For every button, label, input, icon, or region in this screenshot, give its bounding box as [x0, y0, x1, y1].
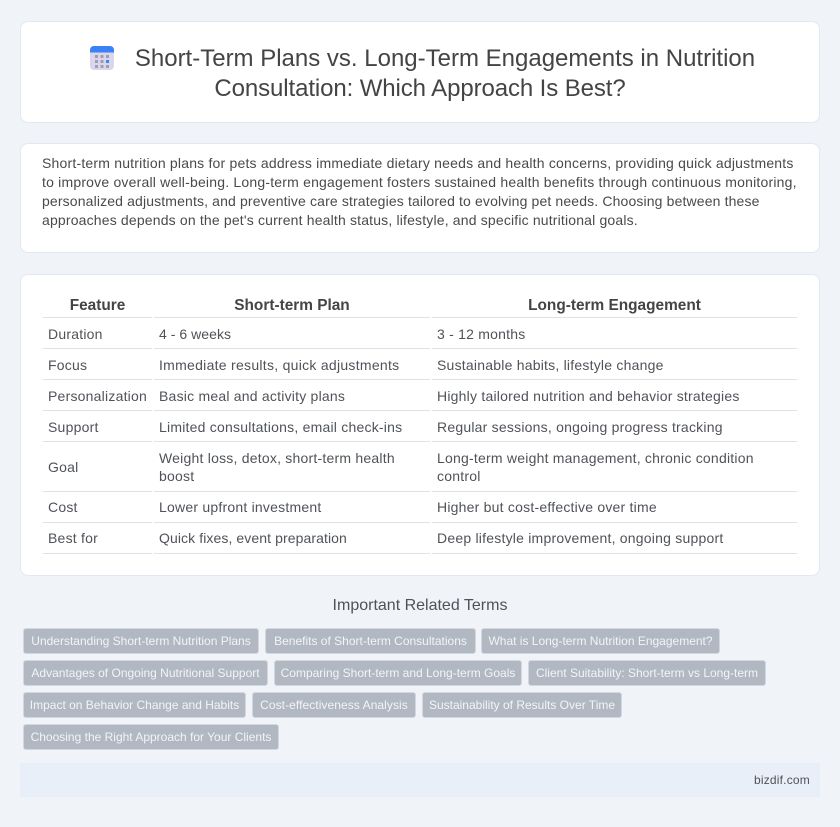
- tags: related terms: Understanding Short-term Nutrition Plans: [31, 634, 251, 648]
- heading: related terms: Important Related Terms: [333, 597, 507, 614]
- text block: description: approaches depends on the pet's current health status, lifestyle, and specific nutritional goals.: [42, 212, 638, 228]
- tags: related terms: Choosing the Right Approach for Your Clients: [31, 730, 271, 744]
- tags: related terms: What is Long-term Nutrition Engagement?: [488, 634, 713, 648]
- tags: related terms: Client Suitability: Short-term vs Long-term: [536, 666, 758, 680]
- table: comparison: Deep lifestyle improvement, ongoing support: [437, 530, 724, 546]
- panel: comparison table: [20, 274, 820, 576]
- tags: related terms: Cost-effectiveness Analysis: [260, 698, 408, 712]
- table: comparison: Best for: [48, 530, 98, 546]
- tags: related terms: Comparing Short-term and Long-term Goals: [281, 666, 515, 680]
- table: comparison: Regular sessions, ongoing progress tracking: [437, 419, 723, 435]
- table: comparison: Feature: [70, 297, 125, 314]
- table: comparison: Higher but cost-effective over time: [437, 499, 657, 515]
- footer text: bizdif.com: [754, 773, 810, 787]
- panel: header: [20, 21, 820, 123]
- table: comparison: boost: [159, 468, 194, 484]
- table: comparison: 3 - 12 months: [437, 326, 525, 342]
- table: comparison: Duration: [48, 326, 103, 342]
- table: comparison: Basic meal and activity plans: [159, 388, 345, 404]
- table: comparison: Weight loss, detox, short-term health: [159, 450, 395, 466]
- panel: description: [20, 143, 820, 253]
- tags: related terms: Advantages of Ongoing Nutritional Support: [31, 666, 260, 680]
- table: comparison: [43, 297, 797, 554]
- tags: related terms: Sustainability of Results Over Time: [429, 698, 615, 712]
- table: comparison: Short-term Plan: [234, 297, 350, 314]
- table: comparison: Personalization: [48, 388, 147, 404]
- table: comparison: Long-term weight management, chronic condition: [437, 450, 754, 466]
- table: comparison: Sustainable habits, lifestyle change: [437, 357, 664, 373]
- table: comparison: Highly tailored nutrition and behavior strategies: [437, 388, 740, 404]
- table: comparison: Quick fixes, event preparation: [159, 530, 347, 546]
- table: comparison: Lower upfront investment: [159, 499, 321, 515]
- table: comparison: control: [437, 468, 481, 484]
- table: comparison: 4 - 6 weeks: [159, 326, 231, 342]
- table: comparison: Immediate results, quick adjustments: [159, 357, 399, 373]
- table: comparison: Goal: [48, 459, 78, 475]
- text block: description: personalized adjustments, and preventive care strategies tailored to evolving pet needs. Choosing between these: [42, 193, 760, 209]
- title: Short-Term Plans vs. Long-Term Engagements in Nutrition: [135, 45, 755, 72]
- table: comparison: Support: [48, 419, 99, 435]
- table: comparison: Limited consultations, email check-ins: [159, 419, 402, 435]
- table: comparison: Cost: [48, 499, 78, 515]
- tags: related terms: [23, 628, 766, 750]
- title: [135, 45, 755, 102]
- icon: calendar: [90, 46, 114, 70]
- title: Consultation: Which Approach Is Best?: [214, 75, 626, 102]
- text block: description: to improve overall well-being. Long-term engagement fosters sustained health benefits through continuous monitoring,: [42, 174, 797, 190]
- tags: related terms: Impact on Behavior Change and Habits: [30, 698, 239, 712]
- tags: related terms: Benefits of Short-term Consultations: [274, 634, 467, 648]
- text block: description: [42, 155, 797, 228]
- footer bar: [20, 763, 820, 797]
- table: comparison: Focus: [48, 357, 87, 373]
- table: comparison: Long-term Engagement: [528, 297, 701, 314]
- text block: description: Short-term nutrition plans for pets address immediate dietary needs and health concerns, providing quick adjustments: [42, 155, 794, 171]
